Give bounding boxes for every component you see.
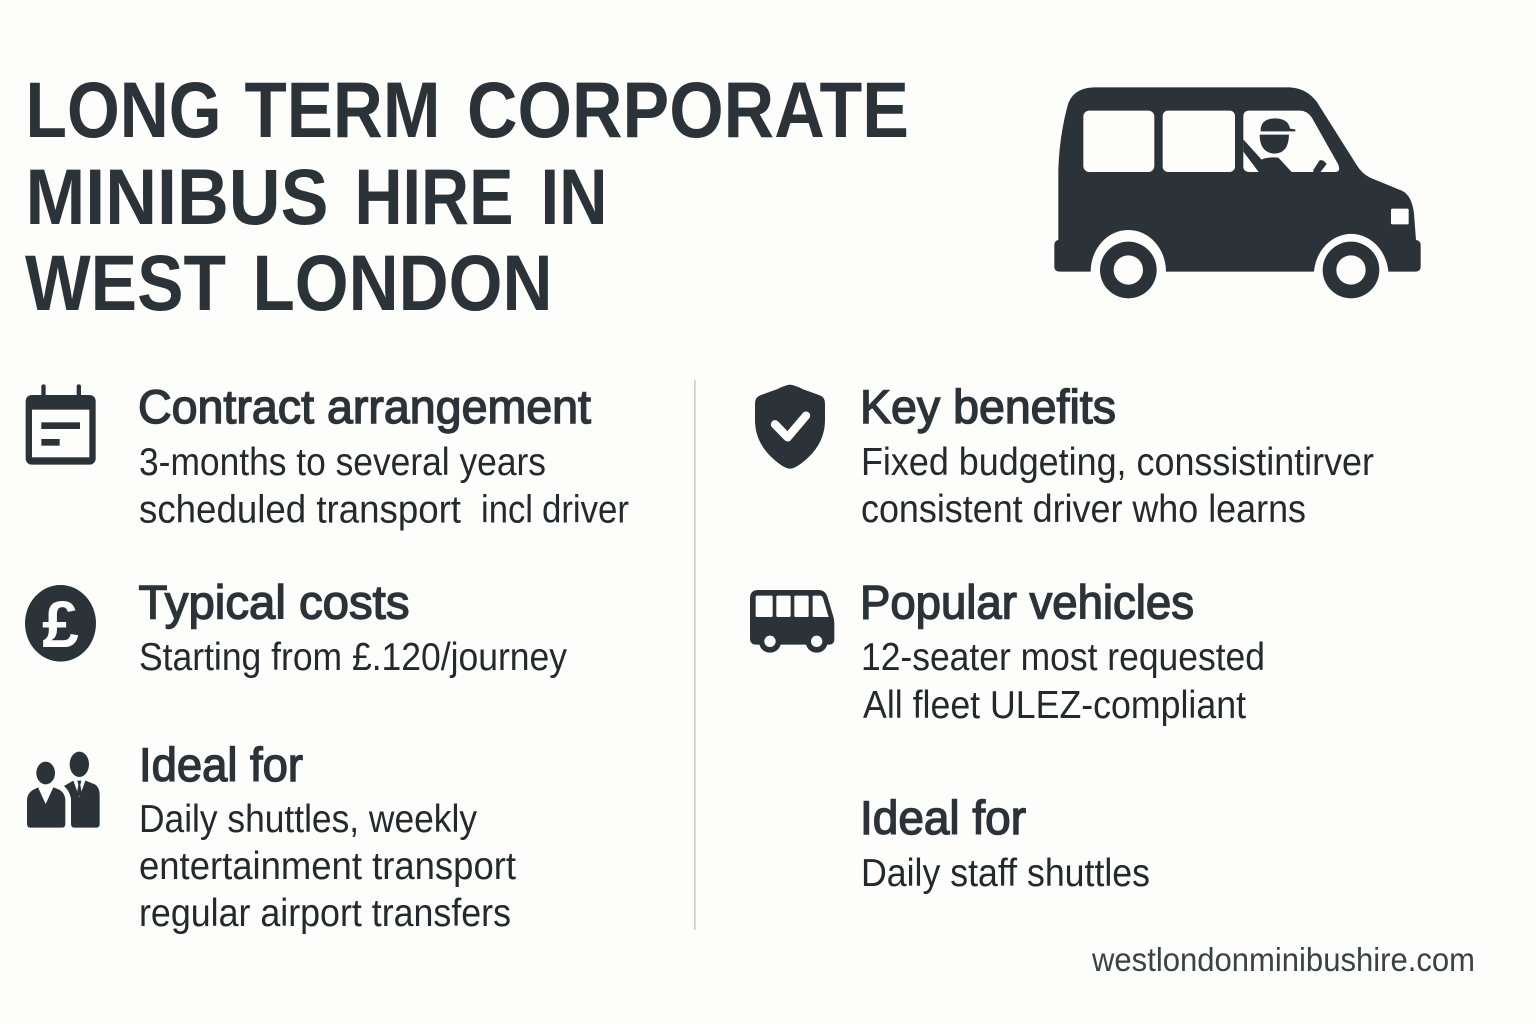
panel: key benefits <box>755 380 1374 531</box>
text block <box>861 636 1265 727</box>
panel: contract arrangement <box>26 380 629 532</box>
icon: pound coin <box>25 585 96 662</box>
heading: Ideal for <box>139 738 303 791</box>
text block: consistent driver who learns <box>861 488 1306 531</box>
heading: Typical costs <box>138 576 410 628</box>
text block: regular airport transfers <box>139 892 511 935</box>
column divider <box>694 380 696 930</box>
icon: small bus <box>750 590 834 653</box>
heading: Popular vehicles <box>860 576 1194 628</box>
heading: Contract arrangement <box>138 380 591 433</box>
text block: Fixed budgeting, conssistintirver <box>861 441 1374 484</box>
text block <box>139 798 516 935</box>
panel: typical costs <box>25 576 568 679</box>
panel: ideal for, left <box>27 738 516 935</box>
heading: Key benefits <box>860 380 1116 433</box>
text block: Daily shuttles, weekly <box>139 798 478 841</box>
text block: incl <box>481 488 533 532</box>
text block: entertainment transport <box>139 845 516 888</box>
text block: All fleet ULEZ-compliant <box>863 684 1246 727</box>
title: TERM <box>244 65 440 154</box>
title: LONG <box>26 65 222 154</box>
website address: westlondonminibushire.com <box>1091 941 1475 978</box>
text block <box>139 441 629 532</box>
heading: Ideal for <box>860 791 1026 844</box>
title: LONDON <box>252 238 552 327</box>
panel: ideal for, right <box>860 791 1150 895</box>
text block: Daily staff shuttles <box>861 852 1150 895</box>
title: CORPORATE <box>467 65 909 154</box>
text block: scheduled transport <box>139 488 461 532</box>
icon: business people <box>27 752 100 828</box>
text block: driver <box>542 488 629 532</box>
text block: 3-months to several years <box>139 441 546 484</box>
title: HIRE <box>354 152 514 241</box>
title <box>25 65 909 327</box>
title: IN <box>540 152 608 241</box>
icon: shield with check <box>755 385 825 469</box>
text block <box>861 441 1374 531</box>
title: MINIBUS <box>26 152 328 241</box>
title: WEST <box>25 238 226 327</box>
panel: popular vehicles <box>750 576 1265 727</box>
icon: pound coin: £ <box>42 587 79 661</box>
text block: Starting from £.120/journey <box>139 636 568 679</box>
icon: minibus with driver <box>1054 87 1421 298</box>
icon: calendar <box>26 384 96 465</box>
text block: 12-seater most requested <box>861 636 1265 679</box>
